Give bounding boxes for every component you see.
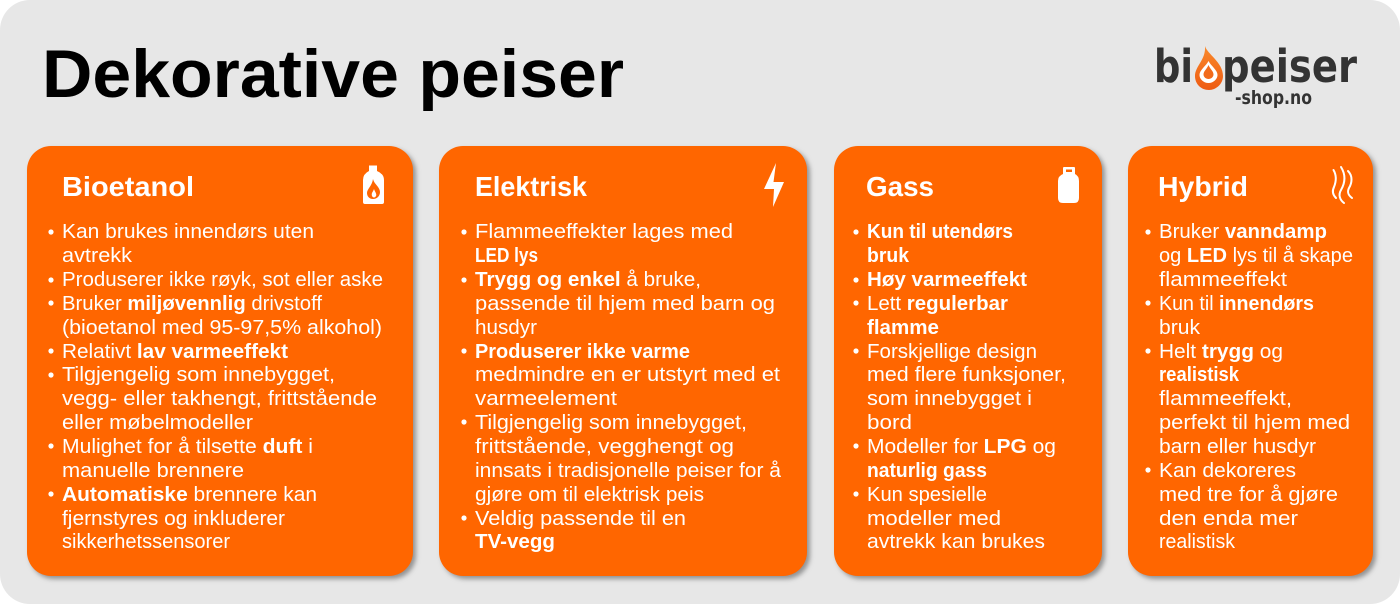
bullet list: Hybrid: Kan dekoreres	[1159, 460, 1296, 482]
bullet list: Elektrisk: husdyr	[475, 317, 537, 339]
bullet list: Hybrid: den enda mer	[1159, 508, 1298, 530]
heading: Hybrid: Hybrid	[1158, 171, 1248, 202]
bullet list: Hybrid: bruk	[1159, 317, 1201, 339]
bullet list: Gass: naturlig gass	[867, 460, 987, 482]
bullet list: Gass: bruk	[867, 245, 910, 267]
bullet list: Bioetanol: Tilgjengelig som innebygget,	[62, 364, 335, 386]
bullet list: Bioetanol: Bruker miljøvennlig drivstoff	[62, 293, 322, 315]
bullet list: Elektrisk: Flammeeffekter lages med	[475, 221, 733, 243]
bullet list: Elektrisk	[461, 221, 782, 553]
bullet list: Bioetanol: Kan brukes innendørs uten	[62, 221, 314, 243]
bullet list: Elektrisk: Produserer ikke varme	[475, 341, 690, 363]
bullet list: Gass: bord	[867, 412, 912, 434]
bullet list: Gass: Lett regulerbar	[867, 293, 1008, 315]
bullet list: Gass: Kun spesielle	[867, 484, 987, 506]
bullet list: Hybrid: og LED lys til å skape	[1159, 245, 1353, 267]
bullet list: Gass: med flere funksjoner,	[867, 364, 1066, 386]
bullet list: Gass: Modeller for LPG og	[867, 436, 1056, 458]
bullet list: Hybrid: barn eller husdyr	[1159, 436, 1316, 458]
bullet list: Hybrid	[1145, 221, 1353, 553]
bullet list: Bioetanol: avtrekk	[62, 245, 133, 267]
bullet list: Elektrisk: frittstående, vegghengt og	[475, 436, 734, 458]
bullet list: Elektrisk: Veldig passende til en	[475, 508, 686, 530]
bullet list: Hybrid: flammeeffekt,	[1159, 388, 1292, 410]
bullet list: Bioetanol: vegg- eller takhengt, frittstående	[62, 388, 377, 410]
panel: Gass	[834, 146, 1102, 576]
logo: biopeiser-shop.no: bi	[1154, 40, 1193, 93]
panel: Bioetanol	[27, 146, 413, 576]
bullet list: Gass: Forskjellige design	[867, 341, 1037, 363]
bullet list: Elektrisk: gjøre om til elektrisk peis	[475, 484, 704, 506]
panel: Hybrid	[1128, 146, 1373, 576]
bullet list: Bioetanol: Produserer ikke røyk, sot eller aske	[62, 269, 383, 291]
bullet list: Elektrisk: varmeelement	[475, 388, 617, 410]
bullet list: Bioetanol: Relativt lav varmeeffekt	[62, 341, 288, 363]
logo: biopeiser-shop.no: peiser	[1222, 40, 1358, 93]
icon: bottle with flame	[363, 166, 384, 204]
bullet list: Bioetanol: Automatiske brennere kan	[62, 484, 317, 506]
bullet list: Gass: avtrekk kan brukes	[867, 531, 1045, 553]
panel: Elektrisk	[439, 146, 807, 576]
heading: Elektrisk: Elektrisk	[475, 171, 587, 202]
title: Dekorative peiser	[42, 36, 624, 112]
bullet list: Bioetanol: Mulighet for å tilsette duft i	[62, 436, 313, 458]
bullet list: Hybrid: flammeeffekt	[1159, 269, 1287, 291]
bullet list: Hybrid: Helt trygg og	[1159, 341, 1283, 363]
bullet list: Elektrisk: LED lys	[475, 245, 538, 267]
heading: Bioetanol: Bioetanol	[62, 171, 194, 202]
bullet list: Elektrisk: innsats i tradisjonelle peiser for å	[475, 460, 782, 482]
bullet list: Hybrid: realistisk	[1159, 364, 1240, 386]
bullet list: Bioetanol: sikkerhetssensorer	[62, 531, 230, 553]
bullet list: Hybrid: perfekt til hjem med	[1159, 412, 1350, 434]
heading: Gass: Gass	[866, 171, 934, 202]
bullet list: Hybrid: Bruker vanndamp	[1159, 221, 1327, 243]
bullet list: Gass: Kun til utendørs	[867, 221, 1013, 243]
bullet list: Gass: som innebygget i	[867, 388, 1032, 410]
bullet list: Gass: Høy varmeeffekt	[867, 269, 1027, 291]
icon: steam waves	[1333, 167, 1352, 203]
icon: gas cylinder	[1058, 167, 1079, 203]
bullet list: Bioetanol: manuelle brennere	[62, 460, 244, 482]
bullet list: Hybrid: Kun til innendørs	[1159, 293, 1314, 315]
bullet list: Elektrisk: TV-vegg	[475, 531, 555, 553]
bullet list: Bioetanol: fjernstyres og inkluderer	[62, 508, 285, 530]
icon: lightning bolt	[764, 163, 784, 207]
bullet list: Gass: flamme	[867, 317, 939, 339]
logo: biopeiser-shop.no: -shop.no	[1235, 87, 1312, 109]
bullet list: Hybrid: med tre for å gjøre	[1159, 484, 1338, 506]
bullet list: Bioetanol: (bioetanol med 95-97,5% alkohol)	[62, 317, 382, 339]
bullet list: Bioetanol	[48, 221, 383, 553]
bullet list: Elektrisk: medmindre en er utstyrt med et	[475, 364, 780, 386]
bullet list: Elektrisk: passende til hjem med barn og	[475, 293, 775, 315]
bullet list: Hybrid: realistisk	[1159, 531, 1236, 553]
bullet list: Gass	[853, 221, 1066, 553]
bullet list: Elektrisk: Tilgjengelig som innebygget,	[475, 412, 747, 434]
bullet list: Gass: modeller med	[867, 508, 1001, 530]
bullet list: Elektrisk: Trygg og enkel å bruke,	[475, 269, 701, 291]
bullet list: Bioetanol: eller møbelmodeller	[62, 412, 253, 434]
logo: biopeiser-shop.no	[1154, 40, 1358, 109]
